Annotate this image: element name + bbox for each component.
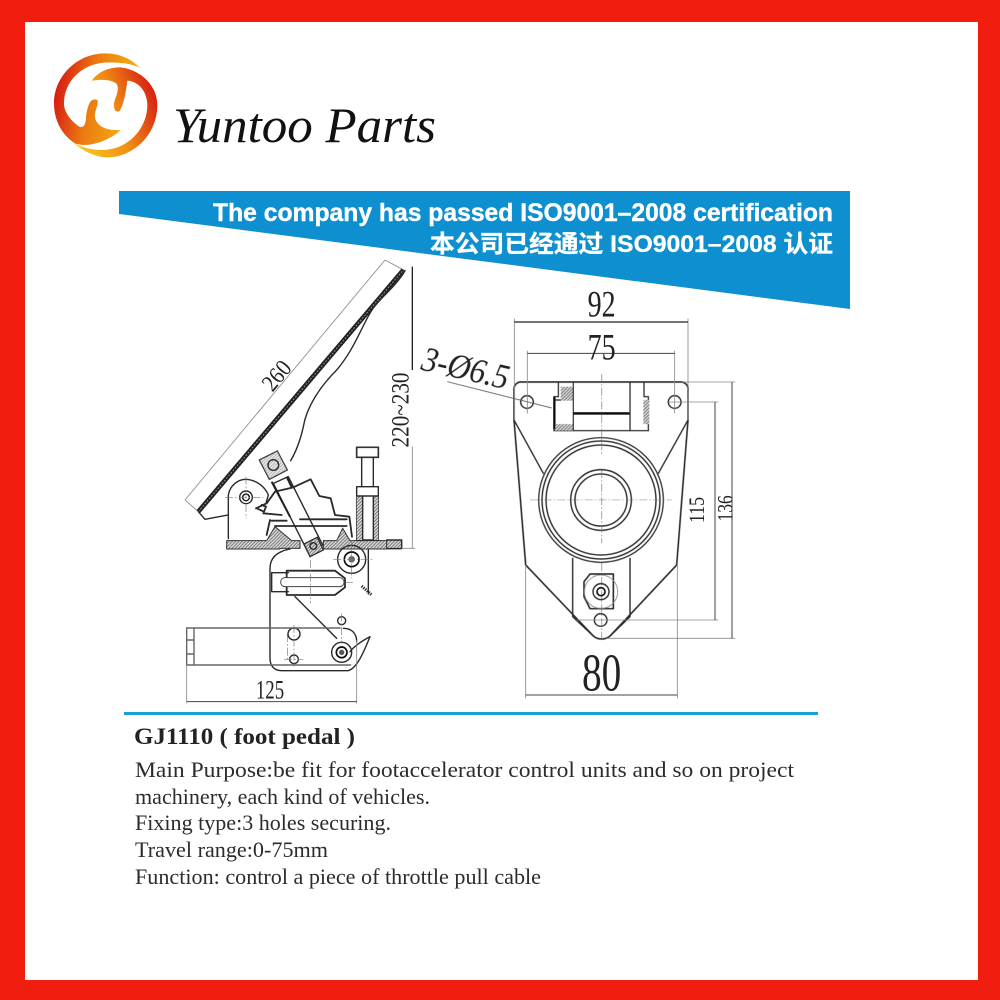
blue certification banner bbox=[119, 191, 850, 309]
leader 3-Ø6.5 bbox=[417, 340, 552, 408]
dimension 260: 260 bbox=[257, 356, 297, 397]
center lines bbox=[530, 374, 672, 640]
dimension 136 bbox=[607, 382, 738, 638]
product title: GJ1110 ( foot pedal ) bbox=[134, 724, 355, 749]
company name: Yuntoo Parts bbox=[173, 97, 436, 153]
dimension 115: 115 bbox=[684, 497, 709, 523]
dimension 125: 125 bbox=[256, 674, 284, 704]
inner ribs bbox=[514, 420, 688, 636]
dimension 75 bbox=[527, 327, 675, 413]
dimension 220-230: 220~230 bbox=[386, 372, 414, 447]
blue divider bbox=[124, 712, 818, 715]
pivot bracket bbox=[225, 477, 268, 539]
dimension 260 bbox=[185, 260, 405, 512]
linkage rod bbox=[259, 451, 323, 557]
logo bbox=[54, 53, 157, 157]
dimension 92 bbox=[514, 285, 688, 420]
mounting holes bbox=[521, 396, 681, 626]
dimension 125 bbox=[187, 640, 357, 704]
banner shape bbox=[119, 191, 850, 309]
logo left swoosh bbox=[54, 53, 140, 145]
boot rings bbox=[539, 438, 663, 562]
rubber bellows bbox=[256, 479, 352, 537]
purpose line 1: Main Purpose:be fit for footaccelerator control units and so on project bbox=[135, 757, 794, 782]
pedal plate and arm bbox=[198, 270, 405, 519]
bracket outline bbox=[514, 382, 688, 639]
product description bbox=[134, 724, 794, 889]
adjusting screw post bbox=[357, 447, 378, 540]
front view technical drawing bbox=[417, 285, 738, 703]
top clevis section bbox=[554, 382, 649, 431]
banner Chinese text: 本公司已经通过 ISO9001–2008 认证 bbox=[430, 231, 833, 258]
dimension 92: 92 bbox=[588, 285, 616, 326]
fixing type: Fixing type:3 holes securing. bbox=[135, 810, 391, 835]
dimension 220-230 bbox=[386, 267, 415, 548]
lower linkage body bbox=[270, 540, 373, 671]
purpose line 2: machinery, each kind of vehicles. bbox=[135, 784, 430, 809]
dimension 136: 136 bbox=[713, 495, 738, 521]
leader 3-Ø6.5: 3-Ø6.5 bbox=[417, 340, 513, 397]
dimension 80 bbox=[526, 565, 677, 703]
dimension 80: 80 bbox=[582, 645, 621, 703]
banner English text: The company has passed ISO9001–2008 certification bbox=[213, 199, 833, 227]
travel range: Travel range:0-75mm bbox=[135, 837, 328, 862]
logo right swoosh bbox=[73, 67, 157, 157]
lower fastener bbox=[584, 574, 618, 609]
dimension 75: 75 bbox=[588, 327, 616, 368]
lower pivot and holes bbox=[284, 613, 357, 667]
pull cable tube bbox=[187, 628, 351, 665]
function: Function: control a piece of throttle pull cable bbox=[135, 864, 541, 889]
dimension 115 bbox=[577, 402, 718, 620]
base plate bbox=[227, 527, 402, 549]
side view technical drawing bbox=[185, 260, 415, 704]
